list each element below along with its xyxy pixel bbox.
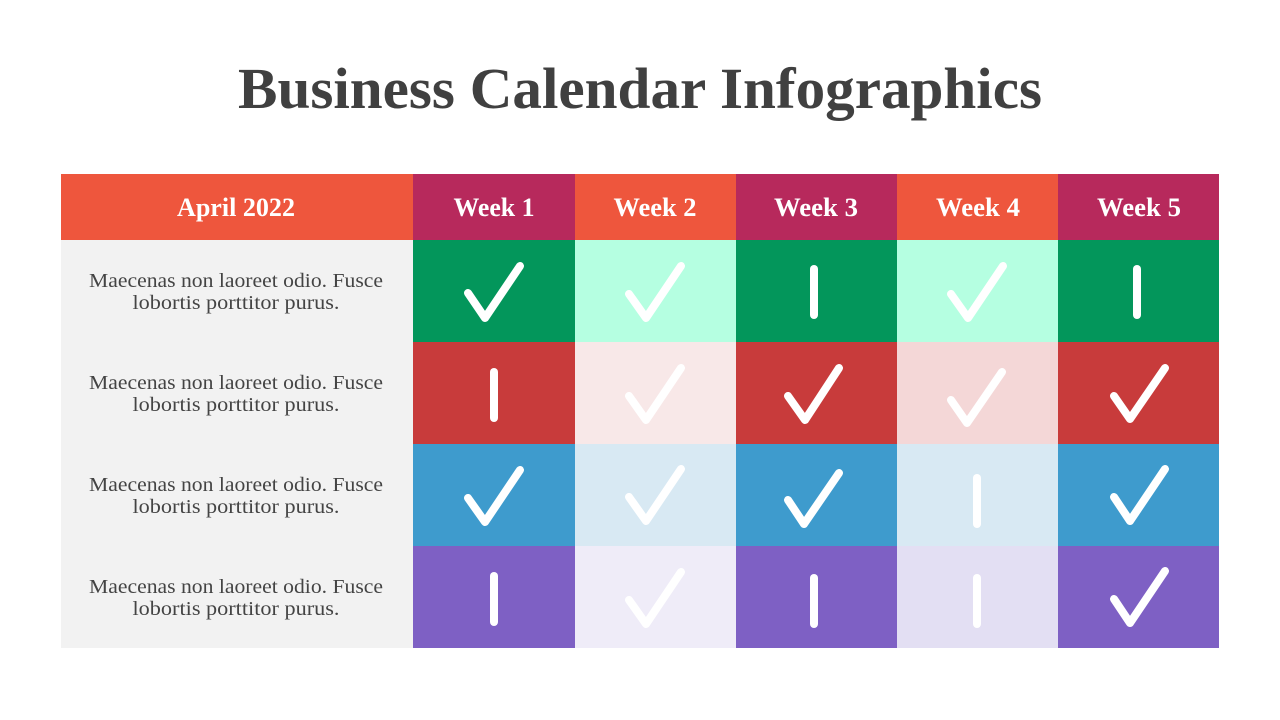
row 1 week 3: bar (736, 240, 897, 342)
calendar table (61, 174, 1219, 648)
header: Week 5 (1058, 174, 1219, 240)
header row (61, 174, 1219, 240)
row 3 description: lobortis porttitor purus. (132, 496, 340, 518)
header: Week 3: Week 3 (774, 193, 858, 222)
header: Week 2: Week 2 (614, 193, 696, 222)
header: Week 1: Week 1 (454, 193, 534, 222)
row 3: blue (89, 444, 1219, 546)
row 1 description: lobortis porttitor purus. (132, 292, 340, 314)
row 4 description: Maecenas non laoreet odio. Fusce (89, 576, 383, 598)
row 4 week 4: bar (897, 546, 1058, 648)
row 2 week 2: check (575, 342, 736, 444)
row 3 week 3: check (736, 444, 897, 546)
row 1 week 5: bar (1058, 240, 1219, 342)
row 1 week 2: check (575, 240, 736, 342)
header: Week 1 (413, 174, 575, 240)
row 1 week 4: check (897, 240, 1058, 342)
header: April 2022: April 2022 (177, 193, 295, 222)
row 1 description: Maecenas non laoreet odio. Fusce (89, 270, 383, 292)
row 2 week 4: check (897, 342, 1058, 444)
row 1 week 1: check (413, 240, 575, 342)
header: Week 5: Week 5 (1097, 193, 1181, 222)
row 4 week 1: bar (413, 546, 575, 648)
row 2: red (89, 342, 1219, 444)
row 4 week 3: bar (736, 546, 897, 648)
header: Week 3 (736, 174, 897, 240)
row 2 week 5: check (1058, 342, 1219, 444)
title: Business Calendar Infographics (238, 56, 1042, 121)
row 3 week 5: check (1058, 444, 1219, 546)
row 4 description: lobortis porttitor purus. (132, 598, 340, 620)
row 1: green (89, 240, 1219, 342)
row 3 week 1: check (413, 444, 575, 546)
row 4: purple (89, 546, 1219, 648)
row 4 week 5: check (1058, 546, 1219, 648)
row 2 week 1: bar (413, 342, 575, 444)
header: April 2022 (61, 174, 413, 240)
row 2 week 3: check (736, 342, 897, 444)
row 3 week 2: check (575, 444, 736, 546)
header: Week 4 (897, 174, 1058, 240)
header: Week 2 (575, 174, 736, 240)
row 2 description: Maecenas non laoreet odio. Fusce (89, 372, 383, 394)
row 3 description: Maecenas non laoreet odio. Fusce (89, 474, 383, 496)
row 4 week 2: check (575, 546, 736, 648)
description column panel (61, 240, 413, 648)
row 3 week 4: bar (897, 444, 1058, 546)
header: Week 4: Week 4 (936, 193, 1020, 222)
row 2 description: lobortis porttitor purus. (132, 394, 340, 416)
